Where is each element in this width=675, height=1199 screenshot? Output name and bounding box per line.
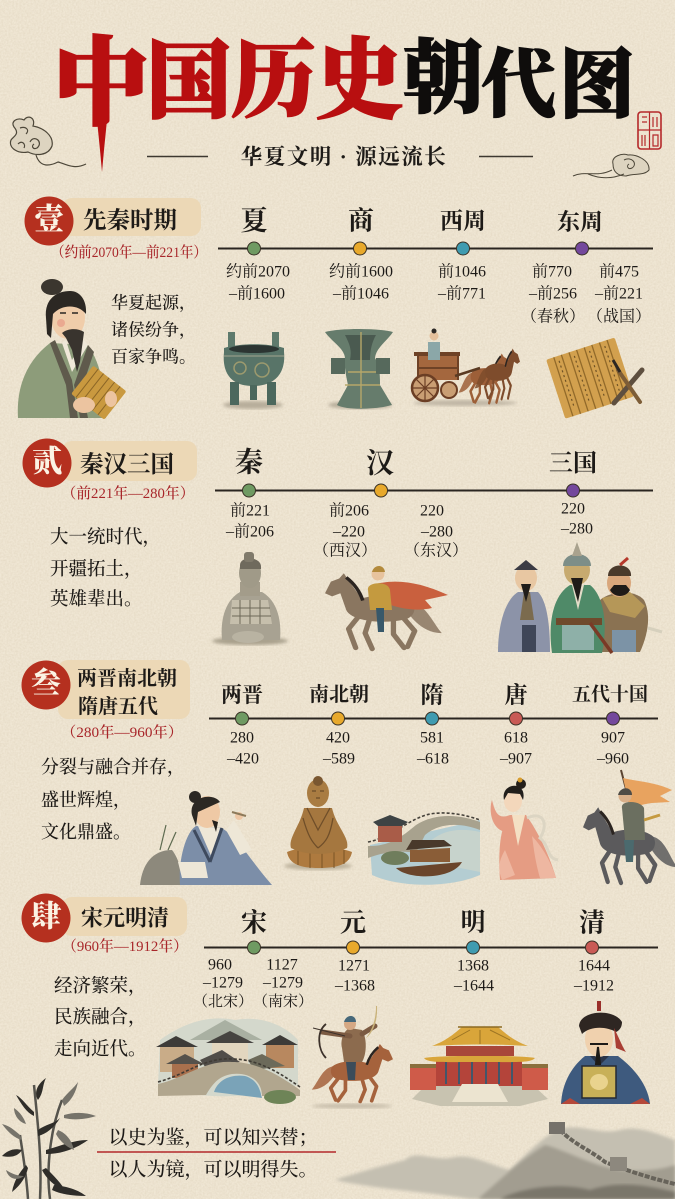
section 4 description xyxy=(54,976,147,1060)
icon: terracotta warrior xyxy=(212,552,288,645)
footer quote xyxy=(97,1126,336,1180)
title red part: 史 xyxy=(315,34,403,130)
dates 3: –589 xyxy=(322,750,355,768)
icon: Tang lady xyxy=(491,778,558,880)
dates 2: –280 xyxy=(420,524,453,540)
dates 4: （北宋） xyxy=(193,993,253,1010)
dates 3: 618 xyxy=(504,730,528,746)
dates 4: 1644 xyxy=(578,958,610,974)
icon: Five Dynasties rider with flag xyxy=(583,770,675,883)
title xyxy=(53,30,635,172)
dates 1: （战国） xyxy=(587,308,651,326)
timeline 1: 西周 xyxy=(440,208,486,234)
timeline 2 xyxy=(215,446,653,497)
section 3 description xyxy=(41,757,185,842)
title black part xyxy=(403,36,635,128)
section 2 description: 大一统时代， xyxy=(50,527,161,548)
section 2 description xyxy=(50,527,161,610)
section 2 description: 开疆拓土， xyxy=(50,559,143,580)
icon: Han rider with red cape xyxy=(325,566,448,649)
timeline 3: 隋 xyxy=(420,682,444,708)
timeline 2: 秦 xyxy=(235,446,263,478)
title black part: 朝 xyxy=(403,36,483,124)
timeline 3 xyxy=(209,682,658,725)
title red part xyxy=(53,30,403,172)
title red part: 历 xyxy=(231,36,315,128)
dates 1: 约前1600 xyxy=(329,262,393,280)
dates 2: 220 xyxy=(420,502,444,520)
title black part: 图 xyxy=(559,44,635,128)
section 3 description: 盛世辉煌， xyxy=(41,789,131,811)
title red part: 中 xyxy=(53,30,149,138)
section 3 header xyxy=(22,660,190,741)
icon: left cloud xyxy=(10,117,86,167)
dates 4: –1279 xyxy=(262,974,303,992)
icon: bronze ding xyxy=(223,332,284,409)
icon: right cloud xyxy=(573,154,649,178)
seal stamp xyxy=(638,112,661,149)
timeline 1: 商 xyxy=(348,206,374,236)
section 1 header: （约前2070年—前221年） xyxy=(51,243,207,261)
section 3 header: （280年—960年） xyxy=(61,723,183,741)
timeline 1 xyxy=(218,206,653,255)
section 2 header: （前221年—280年） xyxy=(62,484,194,502)
icon: three kingdoms generals xyxy=(498,542,662,653)
section 2 description: 英雄辈出。 xyxy=(50,589,143,610)
dates 2: –280 xyxy=(560,520,593,538)
icon: Sui bridge and boat xyxy=(368,813,480,885)
dates 3: 581 xyxy=(420,730,444,746)
section 4 header: 宋元明清 xyxy=(81,906,169,930)
dates 3: 907 xyxy=(601,730,625,746)
dates 4: 960 xyxy=(208,956,232,974)
subtitle: 华夏文明 · 源远流长 xyxy=(241,145,447,169)
dates 4: 1127 xyxy=(266,956,298,974)
timeline 2: 汉 xyxy=(366,448,394,480)
dates 1: 约前2070 xyxy=(226,262,290,280)
section 2 header xyxy=(22,438,197,502)
section 4 header: （960年—1912年） xyxy=(62,937,188,955)
dates 1: –前1600 xyxy=(228,284,285,302)
dates 4: –1368 xyxy=(334,978,375,994)
icon: Song water town xyxy=(156,1018,300,1104)
icon: bamboo slips and brush xyxy=(546,338,642,419)
dates 4: 1271 xyxy=(338,958,370,974)
dates 1: –前1046 xyxy=(332,284,389,302)
dates 3: –420 xyxy=(226,750,259,768)
section 1 description: 百家争鸣。 xyxy=(111,348,196,366)
section 4 description: 经济繁荣， xyxy=(54,976,147,997)
dates 1: –前771 xyxy=(437,284,486,302)
dates 4 xyxy=(193,956,614,1010)
dates 3: 280 xyxy=(230,730,254,746)
section 3 header: 隋唐五代 xyxy=(78,694,158,718)
dates 4: （南宋） xyxy=(253,993,313,1010)
timeline 4: 元 xyxy=(340,908,366,938)
footer quote: 以人为镜，可以明得失。 xyxy=(108,1158,318,1180)
landscape: mountains and great wall xyxy=(335,1122,675,1199)
dates 4: –1912 xyxy=(573,978,614,994)
timeline 3: 唐 xyxy=(504,682,528,708)
timeline 2: 三国 xyxy=(549,450,597,477)
dates 2 xyxy=(225,500,593,560)
dates 2: 220 xyxy=(561,500,585,518)
footer quote: 以史为鉴，可以知兴替； xyxy=(108,1126,318,1148)
section 1 description: 诸侯纷争， xyxy=(111,320,196,340)
dates 2: （西汉） xyxy=(313,542,377,560)
dates 4: –1644 xyxy=(453,978,494,994)
dates 3: 420 xyxy=(326,730,350,746)
section 2 header: 秦汉三国 xyxy=(80,451,174,478)
icon: Qing official xyxy=(561,1001,650,1104)
timeline 3: 五代十国 xyxy=(572,684,648,706)
timeline 4: 明 xyxy=(460,908,486,936)
dates 1: –前256 xyxy=(528,284,577,302)
dates 2: 前206 xyxy=(329,502,369,520)
section 3 header: 两晋南北朝 xyxy=(77,667,177,690)
dates 1: 前770 xyxy=(532,262,572,280)
section 4 description: 民族融合， xyxy=(54,1007,147,1028)
timeline 3: 南北朝 xyxy=(309,683,369,706)
dates 1: 前475 xyxy=(599,262,639,280)
dates 3: –960 xyxy=(596,750,629,768)
title red part: 国 xyxy=(147,36,231,130)
panel: section 3 Jin to Five Dynasties xyxy=(22,660,675,885)
dates 2: –前206 xyxy=(225,522,274,540)
timeline 1: 东周 xyxy=(557,210,603,234)
timeline 3: 两晋 xyxy=(221,683,263,707)
timeline 4 xyxy=(204,908,658,954)
dates 1 xyxy=(226,262,651,326)
section 1 header xyxy=(24,196,207,261)
dates 1: 前1046 xyxy=(438,262,486,280)
icon: seated Jin scholar xyxy=(140,791,272,885)
section 1 description: 华夏起源， xyxy=(111,294,196,312)
dates 3: –618 xyxy=(416,750,449,768)
dates 2: （东汉） xyxy=(404,542,468,560)
section 3 description: 分裂与融合并存， xyxy=(41,757,185,778)
section 2 header: 贰 xyxy=(32,446,62,478)
dates 4: –1279 xyxy=(202,974,243,992)
panel: section 2 Qin Han Three Kingdoms xyxy=(22,438,662,653)
section 4 header: 肆 xyxy=(31,900,62,934)
icon: Yuan mounted archer xyxy=(312,1006,393,1108)
section 3 header: 叁 xyxy=(31,666,61,700)
icon: scholar holding bamboo book xyxy=(18,279,126,420)
icon: bronze zun vessel xyxy=(325,329,393,409)
dates 3 xyxy=(226,730,629,768)
timeline 4: 清 xyxy=(579,908,605,938)
dates 1: （春秋） xyxy=(521,306,585,326)
section 4 description: 走向近代。 xyxy=(54,1039,147,1060)
icon: Ming palace xyxy=(410,1027,548,1106)
section 1 header: 先秦时期 xyxy=(83,207,177,234)
section 1 header: 壹 xyxy=(34,204,64,236)
dates 4: 1368 xyxy=(457,958,489,974)
timeline 4: 宋 xyxy=(241,908,267,938)
dates 1: –前221 xyxy=(594,284,643,302)
panel: section 1 pre-Qin xyxy=(18,196,653,420)
section 3 description: 文化鼎盛。 xyxy=(41,822,131,842)
dates 2: –220 xyxy=(332,524,365,540)
dates 2: 前221 xyxy=(230,502,270,520)
panel: section 4 Song Yuan Ming Qing xyxy=(22,894,658,1108)
title black part: 代 xyxy=(482,45,557,127)
icon: bamboo xyxy=(2,1078,96,1199)
icon: horse chariot xyxy=(412,328,520,406)
timeline 1: 夏 xyxy=(240,206,268,236)
dates 3: –907 xyxy=(499,750,532,768)
icon: Buddha statue xyxy=(284,776,352,870)
section 4 header xyxy=(22,894,188,955)
section 1 description xyxy=(111,294,196,366)
